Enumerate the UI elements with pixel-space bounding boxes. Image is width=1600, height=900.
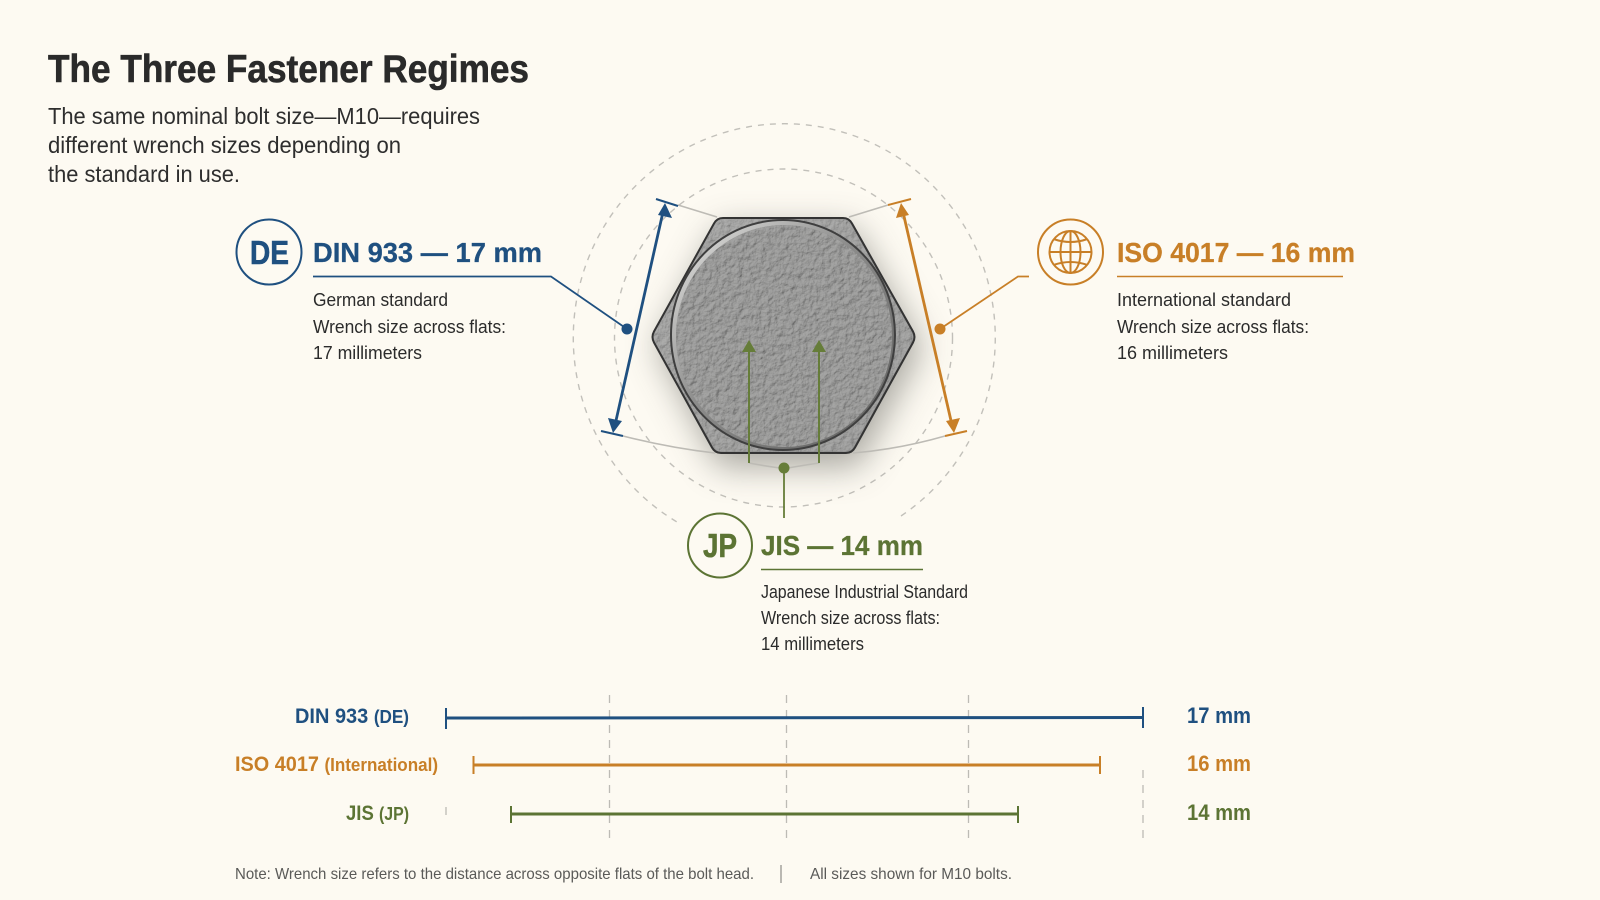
blue dimension arrow	[601, 199, 678, 436]
dashed reference circles	[573, 124, 995, 522]
hexagon head	[652, 218, 914, 453]
value: 17 mm: 17 mm	[1187, 703, 1251, 728]
JIS underline	[761, 568, 923, 570]
green dimension arrows	[742, 340, 826, 463]
DIN description	[313, 290, 506, 363]
bar: ISO 4017	[474, 756, 1100, 774]
subtitle: the standard in use.	[48, 161, 240, 187]
bolt head illustration	[652, 218, 922, 467]
footnote: Note: Wrench size refers to the distance across opposite flats of the bolt head.	[235, 866, 754, 883]
callout: ISO 4017	[934, 220, 1355, 363]
JP badge: JP	[703, 527, 737, 564]
icon: globe	[1038, 220, 1103, 284]
footnote: All sizes shown for M10 bolts.	[810, 866, 1012, 883]
extension lines	[623, 205, 945, 468]
DIN leader line	[313, 276, 632, 334]
callout: JIS	[688, 462, 968, 654]
DIN description: German standard	[313, 290, 448, 310]
DIN heading: DIN 933 — 17 mm	[313, 237, 542, 268]
bolt shadow	[657, 228, 922, 467]
round cap face	[676, 225, 892, 447]
JIS description: Wrench size across flats:	[761, 608, 940, 628]
chart gridlines	[446, 695, 1143, 840]
DIN description: 17 millimeters	[313, 343, 422, 363]
title: The Three Fastener Regimes	[48, 48, 529, 91]
JIS description: Japanese Industrial Standard	[761, 582, 968, 602]
ISO description: International standard	[1117, 290, 1291, 310]
subtitle	[48, 103, 480, 187]
label: ISO 4017: ISO 4017 (International)	[235, 753, 438, 776]
orange dimension arrow	[888, 199, 967, 436]
JIS heading: JIS — 14 mm	[761, 530, 923, 561]
hexagon texture	[654, 220, 913, 452]
JIS leader	[778, 462, 790, 518]
bar: DIN 933	[446, 707, 1143, 729]
DE badge: DE	[250, 234, 289, 271]
ISO description	[1117, 290, 1309, 363]
JIS description: 14 millimeters	[761, 634, 864, 654]
JP badge	[688, 514, 752, 578]
bar: JIS	[511, 806, 1018, 823]
ISO description: 16 millimeters	[1117, 343, 1228, 363]
label: JIS: JIS (JP)	[346, 802, 409, 825]
ISO description: Wrench size across flats:	[1117, 317, 1309, 337]
callout: DIN 933	[236, 220, 632, 363]
ISO underline	[1117, 276, 1343, 278]
ISO heading: ISO 4017 — 16 mm	[1117, 237, 1355, 268]
ISO leader line	[934, 276, 1029, 334]
subtitle: The same nominal bolt size—M10—requires	[48, 103, 480, 129]
JIS description	[761, 582, 968, 654]
footnote	[235, 865, 1012, 883]
round cap rim	[671, 220, 895, 450]
label: DIN 933: DIN 933 (DE)	[295, 705, 409, 728]
comparison chart	[235, 695, 1251, 840]
value: 14 mm: 14 mm	[1187, 800, 1251, 825]
DIN description: Wrench size across flats:	[313, 317, 506, 337]
cap texture	[676, 225, 892, 447]
DE badge	[236, 220, 302, 284]
subtitle: different wrench sizes depending on	[48, 132, 401, 158]
value: 16 mm: 16 mm	[1187, 751, 1251, 776]
